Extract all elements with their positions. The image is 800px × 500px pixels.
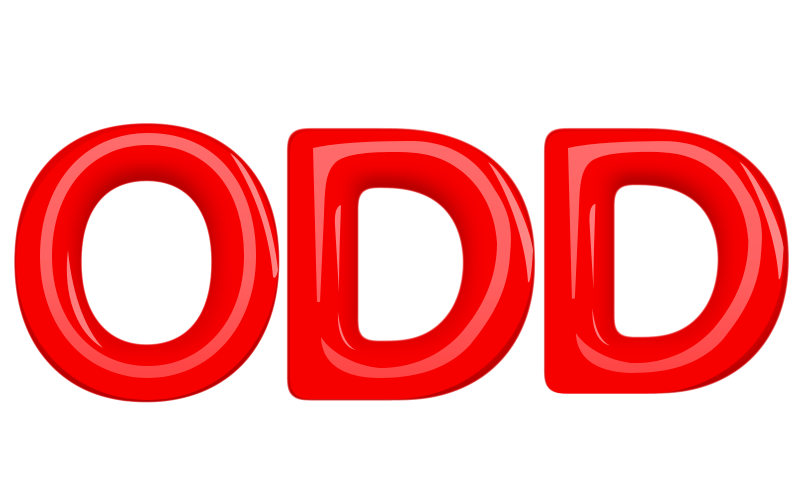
- first D upper right specular: [488, 162, 533, 282]
- letter O: [7, 53, 287, 470]
- first D bright outer rim: [290, 131, 533, 399]
- first D glyph: D: [270, 58, 542, 469]
- first D gloss band: [313, 141, 511, 378]
- O bright outer rim: [16, 126, 278, 400]
- O glyph: O: [7, 53, 287, 470]
- second D gloss band: [568, 141, 762, 373]
- second D glyph: D: [528, 58, 796, 462]
- O gloss band: [46, 139, 250, 372]
- first D inner specular: [335, 205, 356, 350]
- O upper right specular: [230, 153, 278, 278]
- second D bright outer rim: [545, 131, 784, 393]
- O lower left specular: [67, 250, 103, 348]
- second D upper right specular: [740, 162, 784, 279]
- second D inner specular: [589, 204, 610, 346]
- letter D (second): [528, 58, 796, 462]
- letter D (first): [270, 58, 542, 469]
